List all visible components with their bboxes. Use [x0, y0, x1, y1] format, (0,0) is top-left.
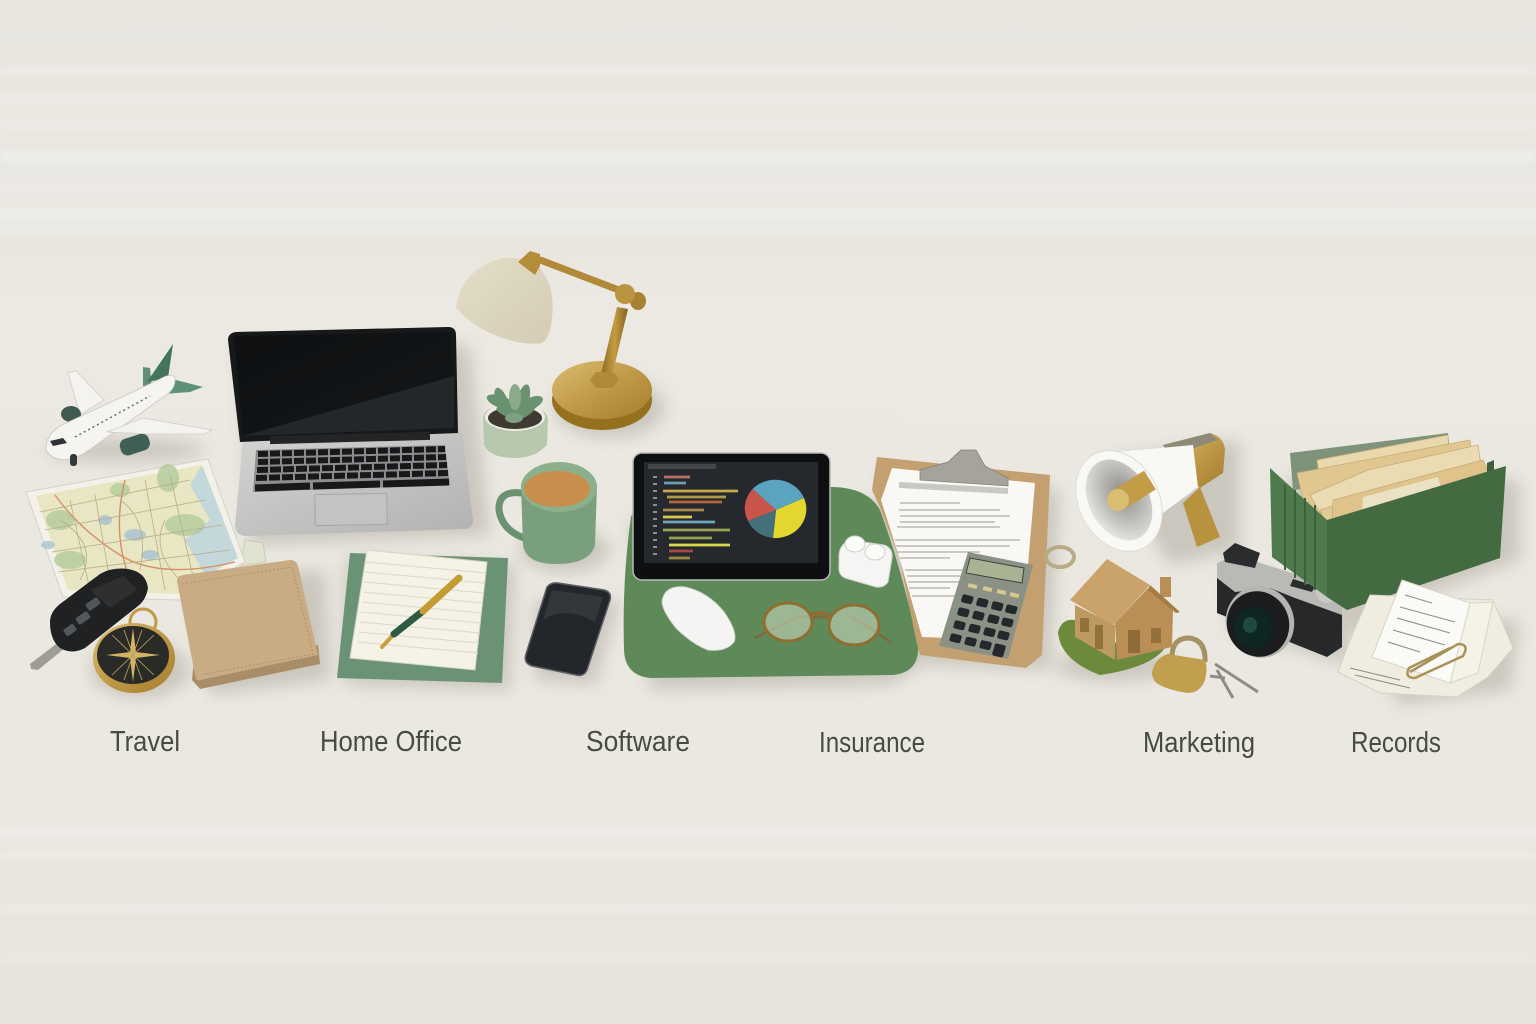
icon: calculator — [939, 552, 1033, 659]
icon: green desk pad — [624, 487, 918, 678]
label: Insurance: Insurance — [819, 727, 925, 759]
icon: camera — [1216, 543, 1342, 667]
icon: wireless earbuds case — [839, 536, 892, 587]
group: insurance items — [872, 450, 1050, 668]
icon: leather wallet — [177, 560, 320, 689]
icon: folder box with files — [1270, 433, 1506, 610]
icon: wooden house on grass — [1058, 559, 1180, 675]
icon: tablet with code and pie chart — [633, 453, 830, 580]
category labels — [110, 726, 1441, 759]
group: records items — [1270, 433, 1513, 697]
label: Records: Records — [1351, 727, 1441, 759]
label: Travel: Travel — [110, 726, 180, 758]
icon: toy airplane — [46, 344, 212, 466]
icon: megaphone — [1059, 433, 1225, 567]
label: Marketing: Marketing — [1143, 727, 1255, 759]
icon: paper stack with paper clip — [1338, 580, 1513, 697]
icon: white mouse — [662, 587, 735, 650]
icon: road map — [26, 459, 266, 600]
icon: succulent in pot — [483, 383, 548, 458]
icon: small ring — [1046, 547, 1074, 567]
icon: clipboard with document — [872, 450, 1050, 668]
label: Software: Software — [586, 726, 690, 758]
icon: laptop — [228, 327, 473, 536]
contact shadows — [45, 345, 1520, 705]
icon: eyeglasses — [754, 603, 892, 645]
group: travel items — [26, 344, 320, 693]
label: Home Office: Home Office — [320, 726, 462, 758]
group: software items — [624, 453, 918, 678]
group: home office items — [228, 251, 652, 683]
icon: brass compass — [93, 609, 175, 693]
icon: desk lamp — [456, 251, 652, 430]
icon: padlock and keys — [1152, 638, 1258, 698]
icon: green mug of coffee — [499, 462, 597, 564]
icon: notebook with pen — [337, 550, 508, 683]
group: marketing items — [1046, 433, 1342, 698]
icon: car key fob — [30, 569, 148, 670]
icon: smartphone — [525, 583, 610, 675]
